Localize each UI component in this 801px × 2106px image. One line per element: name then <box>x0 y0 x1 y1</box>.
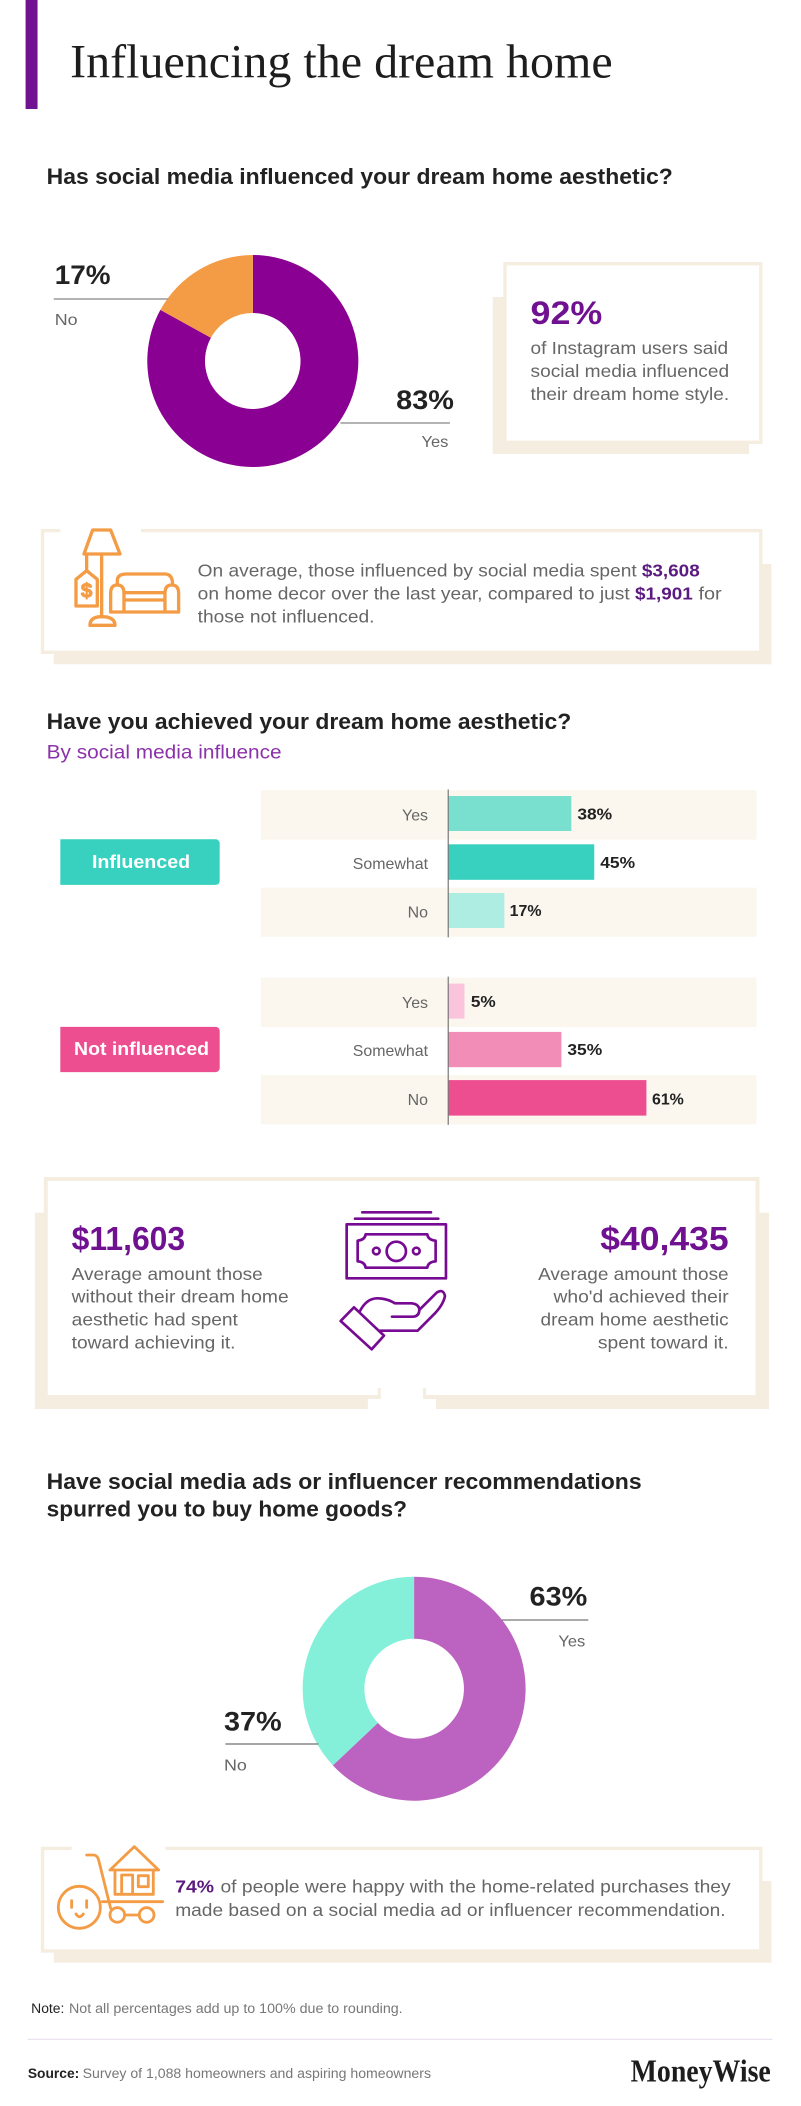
slice: no 37% <box>303 1577 414 1765</box>
donut label: no 37%: No <box>224 1758 247 1775</box>
panel: amount spent comparison: $40,435 <box>600 1220 729 1257</box>
donut label: yes 83%: Yes <box>422 434 448 451</box>
donut label: no 17% <box>54 260 168 329</box>
slice: yes 83% <box>147 255 358 467</box>
panel: happy with purchases <box>43 1844 771 1963</box>
icon: lamp, price tag and sofa <box>76 530 179 625</box>
bar chart: influenced: No <box>408 904 428 922</box>
heading: social media influence: Has social media influenced your dream home aesthetic? <box>47 164 673 189</box>
bar chart: influenced <box>261 790 757 937</box>
panel: home decor spending: on home decor over the last year, compared to just <box>198 583 630 604</box>
panel: happy with purchases: made based on a social media ad or influencer recommendation. <box>175 1900 726 1920</box>
slice: no 17% <box>160 255 253 338</box>
panel: home decor spending: $1,901 <box>635 583 693 604</box>
panel: happy with purchases: 74% <box>175 1877 214 1897</box>
label: not influenced: Not influenced <box>74 1038 209 1059</box>
callout: 92% of Instagram users: their dream home style. <box>531 384 729 404</box>
label: influenced: Influenced <box>92 851 190 872</box>
donut label: yes 83%: 83% <box>396 385 454 415</box>
panel: amount spent comparison: dream home aesthetic <box>541 1310 729 1330</box>
note: Not all percentages add up to 100% due to rounding. <box>69 2000 403 2016</box>
bar chart: influenced: 45% <box>600 855 635 872</box>
panel: happy with purchases: of people were happy with the home-related purchases they <box>220 1877 731 1897</box>
callout: 92% of Instagram users: of Instagram users said <box>531 338 728 358</box>
panel: amount spent comparison: who'd achieved their <box>552 1287 729 1307</box>
donut label: no 17%: No <box>55 312 78 329</box>
donut chart: influenced dream home aesthetic <box>147 255 358 467</box>
bar chart: influenced: Somewhat <box>353 856 429 873</box>
label: not influenced <box>60 1027 220 1072</box>
heading: achieved aesthetic: Have you achieved your dream home aesthetic? <box>47 709 571 734</box>
panel: home decor spending: $3,608 <box>642 561 700 581</box>
bar chart: not influenced: Somewhat <box>353 1043 429 1060</box>
donut label: yes 83% <box>340 385 454 451</box>
title: Influencing the dream home <box>70 35 613 88</box>
bar chart: not influenced: 61% <box>652 1091 684 1108</box>
donut chart: spurred to buy home goods <box>303 1577 526 1801</box>
panel: home decor spending: those not influenced. <box>198 606 374 626</box>
icon: lamp, price tag and sofa: $ <box>81 579 93 602</box>
bar chart: not influenced: Yes <box>402 995 428 1012</box>
donut label: yes 63%: Yes <box>558 1634 585 1651</box>
bar chart: not influenced: 35% <box>567 1042 602 1059</box>
donut label: no 37%: 37% <box>224 1707 282 1737</box>
icon: cash over open hand <box>341 1212 446 1349</box>
title accent bar <box>26 0 38 109</box>
callout: 92% of Instagram users: 92% <box>531 295 602 331</box>
bar chart: influenced: 17% <box>510 903 542 920</box>
panel: amount spent comparison: spent toward it. <box>598 1332 729 1352</box>
panel: amount spent comparison: without their dream home <box>71 1287 289 1307</box>
panel: home decor spending: On average, those influenced by social media spent <box>198 561 637 581</box>
bar chart: not influenced <box>261 977 757 1125</box>
label: influenced <box>60 839 220 885</box>
panel: amount spent comparison <box>35 1179 769 1410</box>
panel: amount spent comparison: Average amount those <box>72 1264 263 1284</box>
panel: home decor spending: for <box>698 583 722 604</box>
logo: MoneyWise: MoneyWise <box>631 2054 771 2089</box>
bar chart: not influenced: 5% <box>471 994 496 1011</box>
bar chart: influenced: 38% <box>577 806 612 823</box>
donut label: yes 63% <box>502 1582 588 1651</box>
callout: 92% of Instagram users: social media influenced <box>531 361 729 381</box>
donut label: yes 63%: 63% <box>530 1582 587 1612</box>
heading: ads and influencer recommendations: Have social media ads or influencer recommendations <box>47 1469 642 1494</box>
panel: amount spent comparison: $11,603 <box>72 1220 185 1257</box>
heading: ads and influencer recommendations: spurred you to buy home goods? <box>47 1497 407 1522</box>
source: Survey of 1,088 homeowners and aspiring homeowners <box>83 2065 431 2081</box>
subheading: By social media influence <box>47 743 282 764</box>
panel: amount spent comparison: aesthetic had spent <box>72 1310 238 1330</box>
bar chart: influenced: Yes <box>402 807 428 824</box>
bar chart: not influenced: No <box>408 1092 428 1109</box>
source: Source: <box>28 2065 79 2081</box>
donut label: no 37% <box>224 1707 319 1775</box>
panel: amount spent comparison: toward achieving it. <box>72 1332 236 1352</box>
callout: 92% of Instagram users <box>493 264 761 454</box>
icon: shopping cart with house and smiley <box>58 1847 163 1928</box>
slice: yes 63% <box>333 1577 526 1801</box>
panel: home decor spending <box>43 527 771 664</box>
note: Note: <box>31 2000 64 2016</box>
donut label: no 17%: 17% <box>55 260 111 290</box>
panel: amount spent comparison: Average amount those <box>538 1264 729 1284</box>
heading: ads and influencer recommendations <box>47 1469 642 1522</box>
